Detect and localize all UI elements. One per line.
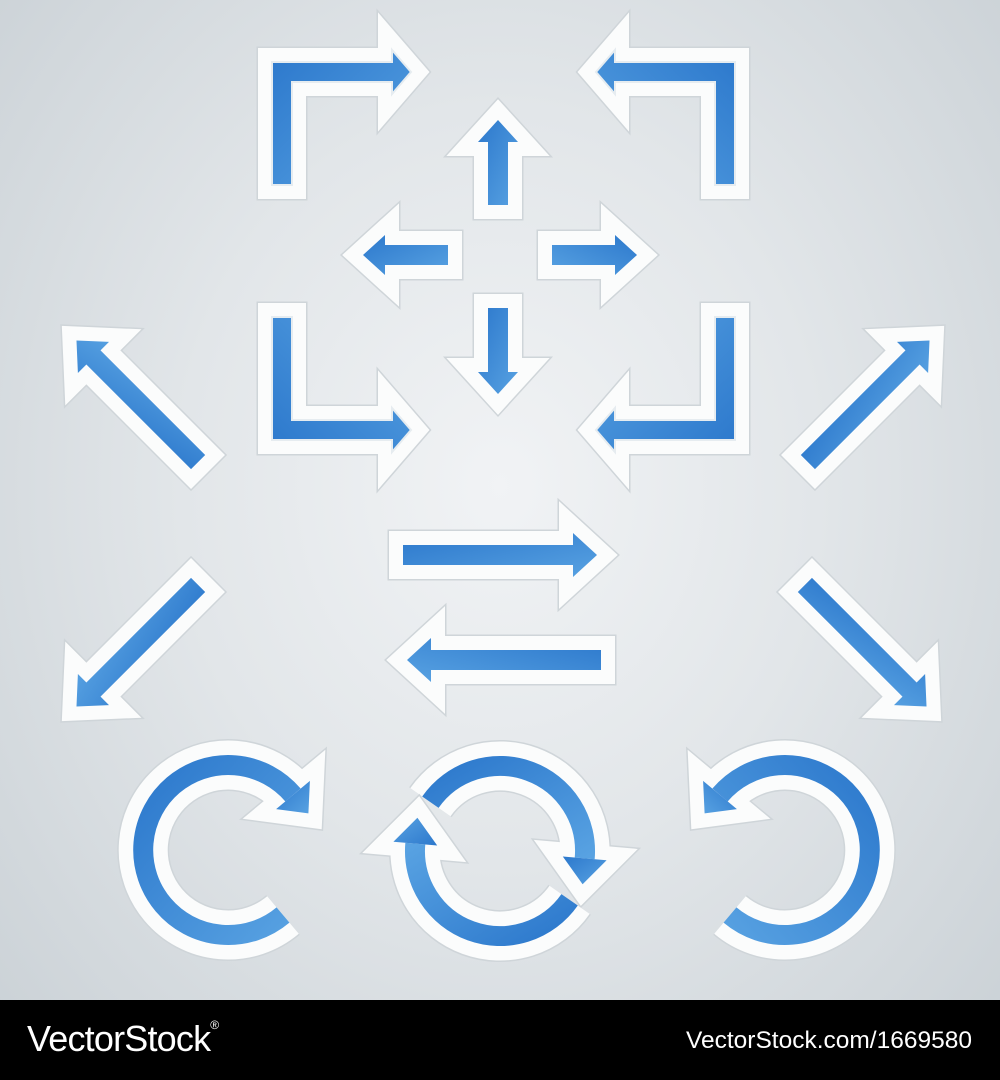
arrow: long left [407, 638, 601, 682]
arrow: circular clockwise left [143, 765, 310, 935]
arrow: long right [403, 533, 597, 577]
arrow: bottom-right corner [596, 317, 735, 452]
arrow: small up [478, 120, 518, 205]
brand logo text: VectorStock® [27, 1018, 218, 1059]
arrow: circular counter-clockwise right [703, 765, 870, 935]
image id url: VectorStock.com/1669580 [686, 1027, 972, 1054]
arrow: top-left corner [272, 50, 411, 185]
arrow: bottom-left corner [272, 317, 411, 452]
arrow: diagonal up-right [792, 325, 945, 478]
arrow: diagonal up-left [61, 325, 214, 478]
arrow: diagonal down-left [61, 569, 214, 722]
arrow: diagonal down-right [789, 569, 942, 722]
arrow: top-right corner [596, 50, 735, 185]
footer bar [0, 1000, 1000, 1080]
arrow: middle cycle bottom half [393, 818, 570, 936]
arrow: middle cycle top half [430, 766, 607, 884]
arrow: small left [363, 235, 448, 275]
arrow: small down [478, 308, 518, 394]
arrow: small right [552, 235, 637, 275]
